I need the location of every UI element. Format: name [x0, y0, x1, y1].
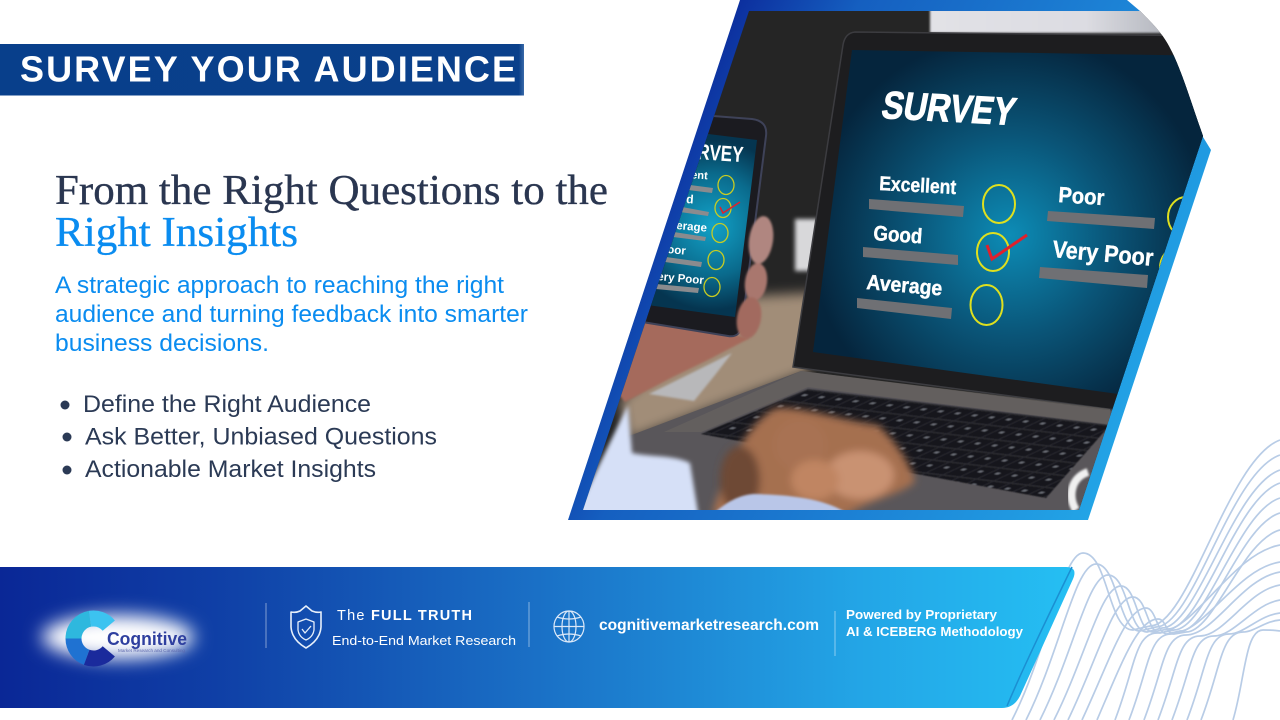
laptop lid	[793, 32, 1220, 424]
heading	[55, 168, 608, 256]
full truth tagline: The FULL TRUTH	[337, 608, 472, 624]
heading: Right Insights	[55, 210, 298, 256]
powered by note	[846, 608, 1023, 639]
survey text on laptop: Good	[873, 222, 923, 248]
survey text on phone: lent	[688, 169, 708, 182]
typing hand	[712, 408, 915, 515]
logo: cognitive: Cognitive	[107, 629, 187, 649]
survey text on laptop: Very Poor	[1051, 236, 1154, 272]
subtitle paragraph: business decisions.	[55, 330, 269, 357]
phone body	[630, 115, 766, 336]
divider lines	[266, 602, 835, 656]
survey text on phone	[657, 139, 745, 287]
coffee cup	[1072, 472, 1088, 510]
survey text on laptop	[866, 84, 1154, 301]
bullet list: Ask Better, Unbiased Questions	[85, 424, 437, 450]
fingers	[734, 215, 776, 341]
survey text on phone: RVEY	[697, 139, 745, 167]
survey text on phone: erage	[676, 220, 707, 235]
keyboard	[701, 389, 1110, 498]
survey text on laptop: Excellent	[879, 173, 957, 199]
full truth tagline: End-to-End Market Research	[332, 633, 516, 648]
survey text on phone: oor	[667, 244, 687, 258]
logo: cognitive: Market Research and Consulting	[118, 648, 185, 653]
subtitle paragraph: audience and turning feedback into smarter	[55, 301, 528, 328]
bullet list	[60, 391, 437, 483]
footer band	[0, 567, 1074, 708]
subtitle paragraph: A strategic approach to reaching the right	[55, 272, 504, 299]
icon: shield	[291, 606, 321, 648]
photo: laptop and phone survey	[583, 11, 1203, 510]
hand holding phone	[615, 318, 750, 402]
left shirt sleeve	[583, 404, 701, 510]
shirt cuff	[716, 492, 844, 510]
survey text on phone: ery Poor	[657, 271, 705, 287]
powered by note: Powered by Proprietary	[846, 608, 997, 622]
heading: From the Right Questions to the	[55, 168, 608, 214]
header band: survey your audience: SURVEY YOUR AUDIENCE	[20, 48, 516, 90]
survey text on phone: d	[686, 192, 694, 207]
survey text on laptop: Average	[866, 271, 943, 301]
powered by note: AI & ICEBERG Methodology	[846, 625, 1023, 639]
logo: cognitive	[42, 615, 194, 659]
phone screen	[640, 133, 757, 317]
bullet list: Actionable Market Insights	[85, 456, 376, 483]
survey text on laptop: SURVEY	[878, 84, 1019, 134]
laptop deck	[630, 371, 1112, 510]
wave line art	[1012, 440, 1280, 720]
laptop screen	[813, 50, 1220, 408]
icon: globe	[554, 611, 584, 642]
full truth tagline	[332, 608, 516, 648]
bullet list: Define the Right Audience	[83, 391, 371, 418]
website url: cognitivemarketresearch.com	[599, 617, 819, 634]
photo frame	[568, 0, 1211, 520]
survey text on laptop: Poor	[1058, 182, 1106, 210]
subtitle paragraph	[55, 272, 528, 357]
